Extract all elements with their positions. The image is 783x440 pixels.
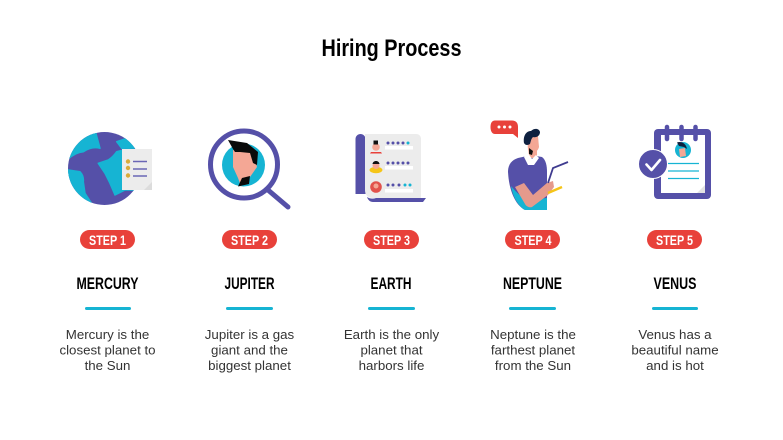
step badge: STEP 5 bbox=[656, 232, 693, 248]
description: Neptune is the bbox=[490, 327, 576, 342]
step 4 column: Neptune bbox=[490, 120, 576, 373]
step badge: STEP 1 bbox=[89, 232, 126, 248]
description: from the Sun bbox=[495, 358, 571, 373]
heading: JUPITER bbox=[224, 274, 274, 293]
description: Mercury is the bbox=[66, 327, 149, 342]
divider bbox=[652, 307, 698, 310]
icon: magnifier with face bbox=[210, 131, 288, 207]
heading: VENUS bbox=[654, 274, 696, 293]
description: planet that bbox=[360, 342, 423, 358]
step 1 column: Mercury bbox=[59, 130, 156, 373]
step 3 column: Earth bbox=[344, 134, 440, 373]
description: giant and the bbox=[211, 342, 288, 358]
step badge bbox=[222, 230, 277, 249]
step 5 column: Venus bbox=[631, 127, 719, 373]
step badge: STEP 2 bbox=[231, 232, 268, 248]
description: Earth is the only bbox=[344, 327, 440, 342]
step badge bbox=[505, 230, 560, 249]
description: beautiful name bbox=[631, 342, 719, 358]
description: and is hot bbox=[646, 358, 704, 373]
description: farthest planet bbox=[491, 342, 575, 358]
step badge: STEP 3 bbox=[373, 232, 410, 248]
description: the Sun bbox=[85, 358, 130, 373]
description: Venus has a bbox=[638, 327, 712, 342]
description: Jupiter is a gas bbox=[205, 327, 295, 342]
description: biggest planet bbox=[208, 358, 291, 373]
description: closest planet to bbox=[59, 342, 156, 358]
icon: notebook with check badge bbox=[638, 127, 711, 199]
step 2 column: Jupiter bbox=[205, 131, 295, 373]
divider bbox=[368, 307, 415, 310]
step badge bbox=[80, 230, 135, 249]
step badge: STEP 4 bbox=[514, 232, 552, 248]
title: Hiring Process bbox=[322, 35, 462, 62]
divider bbox=[509, 307, 556, 310]
heading: EARTH bbox=[370, 274, 412, 293]
step badge bbox=[364, 230, 419, 249]
divider bbox=[85, 307, 131, 310]
step badge bbox=[647, 230, 702, 249]
icon: globe with checklist bbox=[66, 130, 152, 206]
icon: candidate rating list bbox=[356, 134, 426, 202]
heading: NEPTUNE bbox=[503, 274, 562, 293]
heading: MERCURY bbox=[76, 274, 139, 293]
description: harbors life bbox=[359, 358, 424, 373]
divider bbox=[226, 307, 273, 310]
icon: man with tablet and speech bubble bbox=[490, 120, 568, 210]
